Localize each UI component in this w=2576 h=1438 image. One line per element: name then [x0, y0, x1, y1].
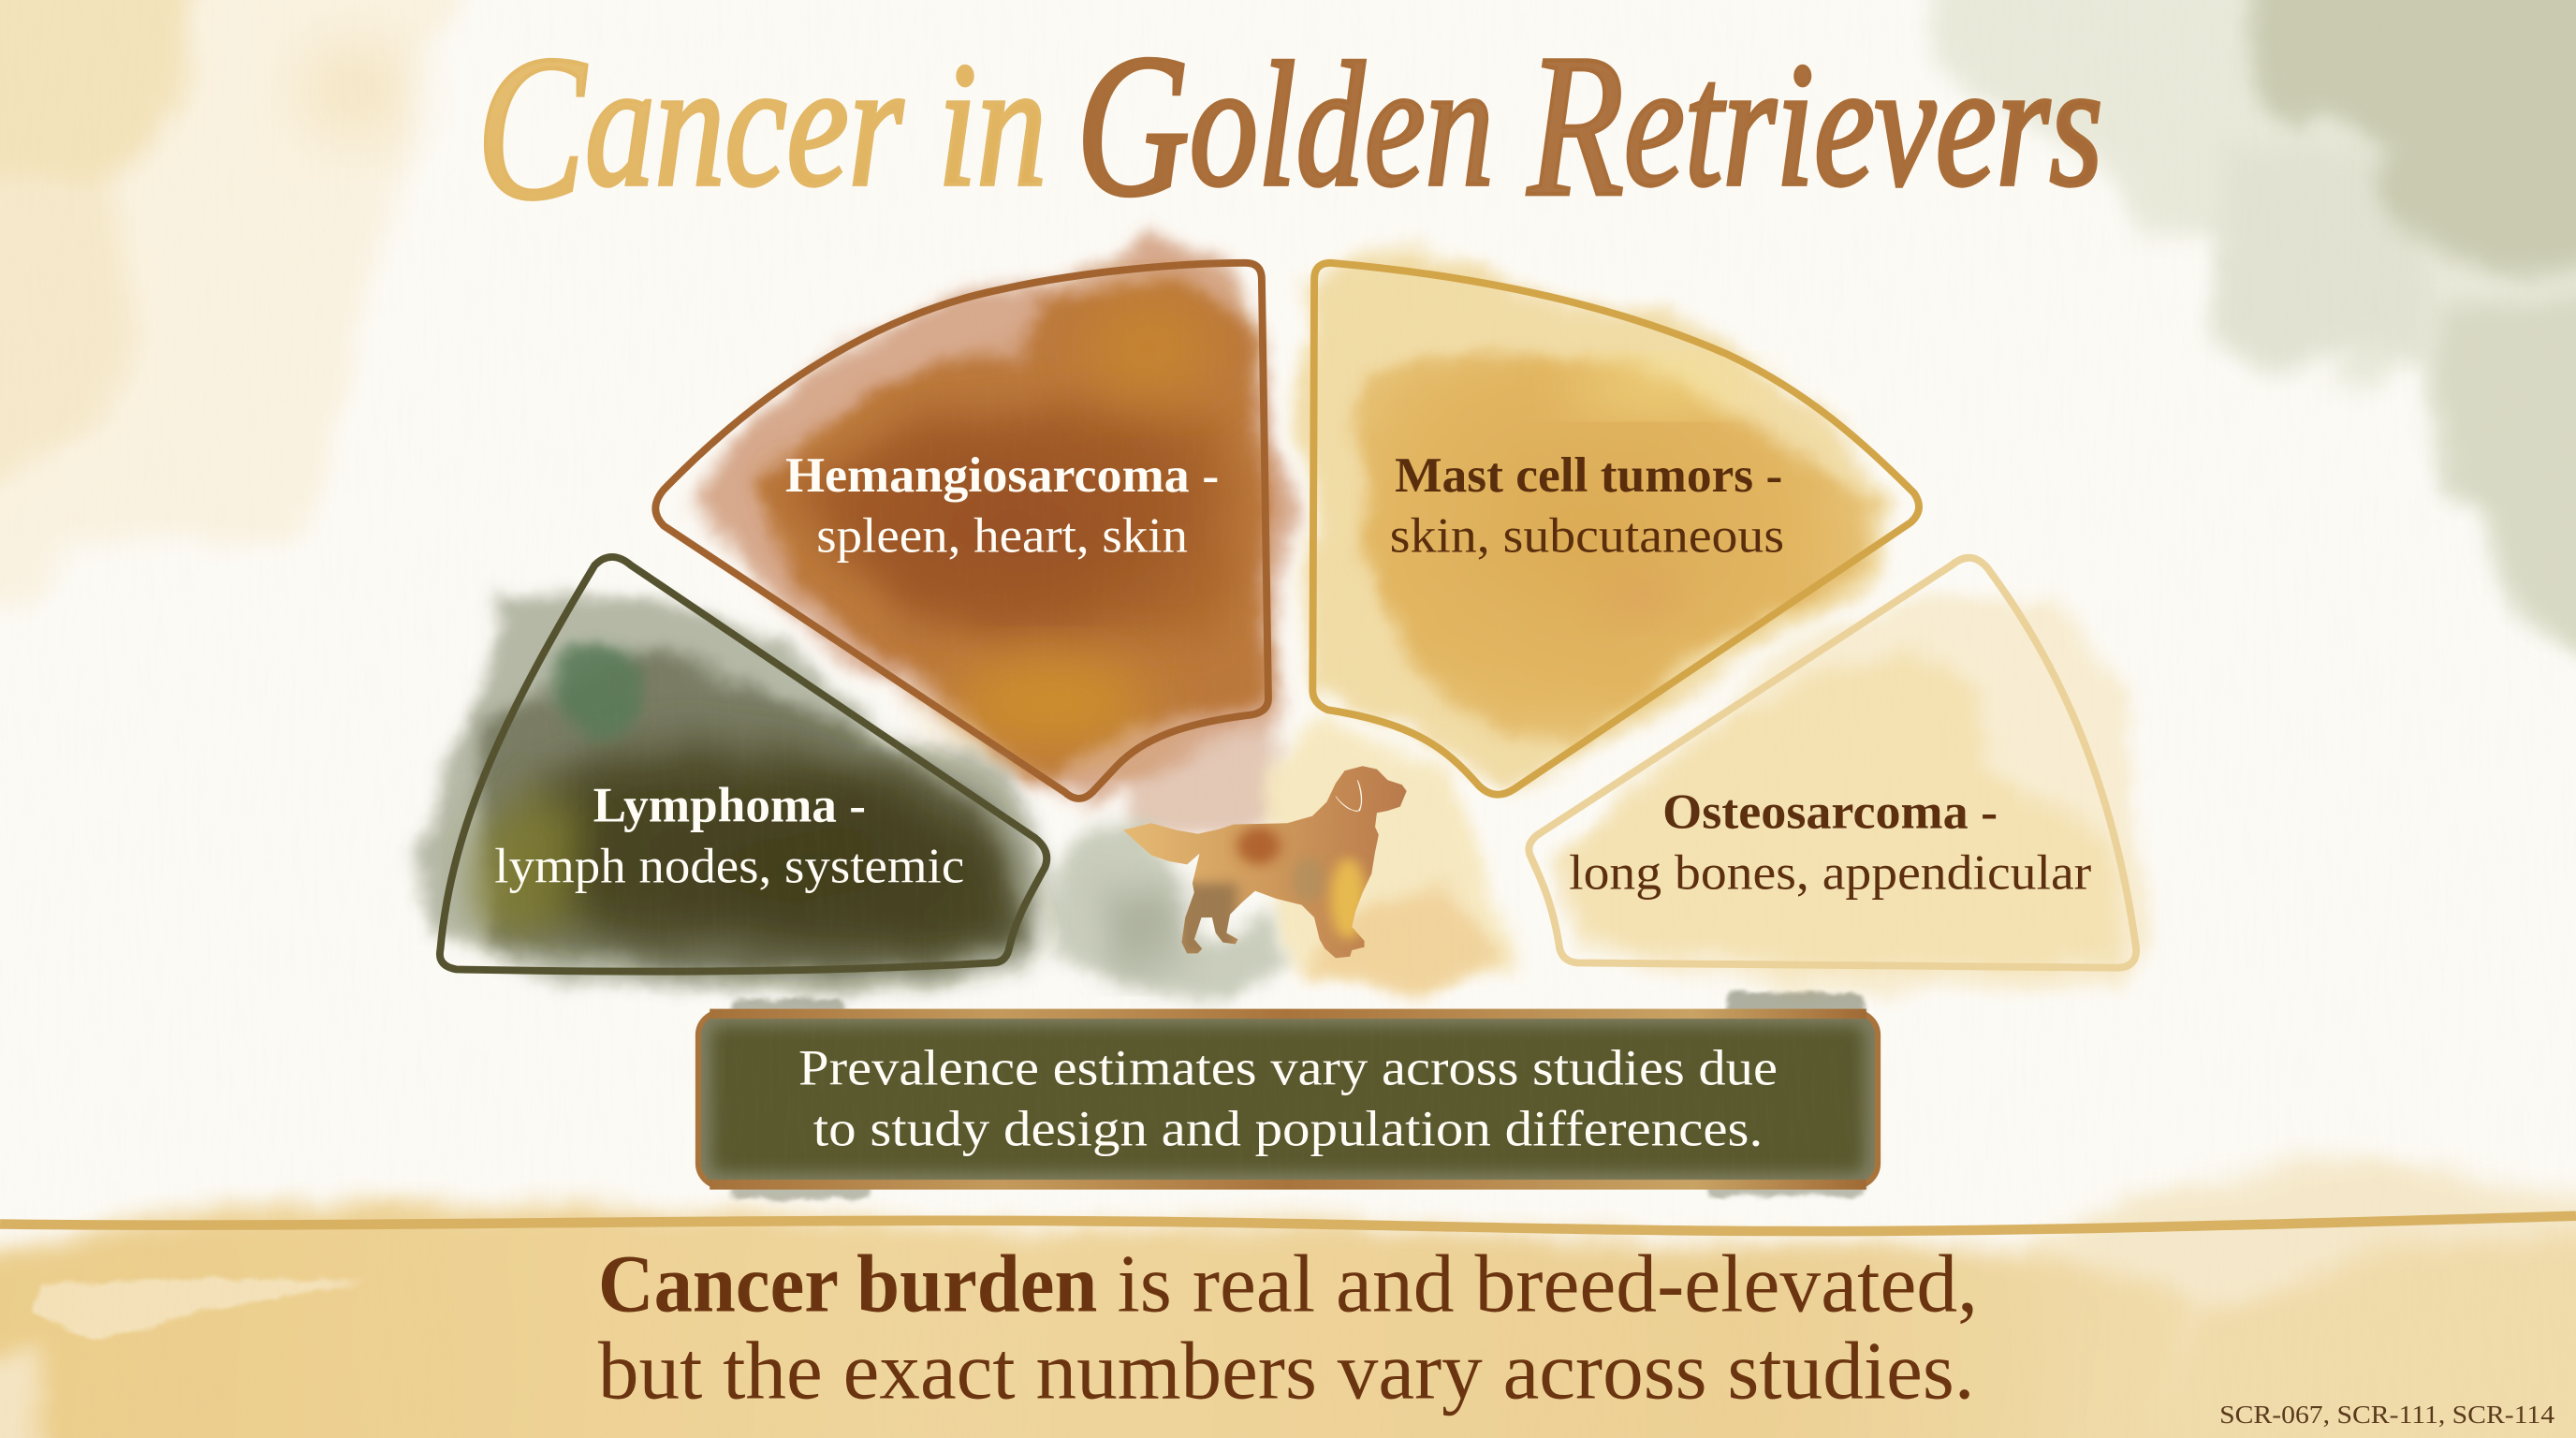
callout: prevalence note: to study design and population differences.: [813, 1100, 1763, 1156]
source references: SCR-067, SCR-111, SCR-114: [2219, 1401, 2555, 1429]
gold bottom bar: [710, 1180, 1866, 1190]
outline: [440, 557, 1046, 972]
label: Lymphoma -: [593, 779, 866, 833]
label: Mast cell tumors -: [1395, 448, 1782, 503]
title: ancer in: [585, 26, 1046, 223]
label: [1569, 785, 2092, 900]
title: [476, 13, 2102, 242]
label: [1390, 448, 1784, 564]
outline: [655, 263, 1268, 799]
divider line: [0, 1216, 2576, 1231]
title: olden: [1190, 26, 1528, 223]
outline: [1312, 263, 1919, 795]
conclusion text: but the exact numbers vary across studies.: [598, 1326, 1975, 1416]
label: lymph nodes, systemic: [494, 839, 964, 893]
gold top bar: [710, 1009, 1866, 1019]
bottom gold band: [0, 1157, 2576, 1438]
conclusion text: [598, 1239, 1978, 1416]
conclusion text: is real and breed-elevated,: [1117, 1239, 1978, 1329]
panel: lymphoma: [414, 557, 1051, 994]
panel: mast cell tumors: [1301, 238, 1919, 795]
title: C: [476, 13, 587, 242]
title: R: [1527, 13, 1624, 239]
title: etrievers: [1624, 26, 2102, 223]
icon: golden retriever silhouette: [1119, 761, 1412, 961]
label: Hemangiosarcoma -: [785, 448, 1219, 503]
label: [494, 779, 964, 893]
panel: osteosarcoma: [1529, 558, 2156, 994]
conclusion text: Cancer burden: [598, 1239, 1097, 1329]
label: [785, 448, 1219, 564]
title: G: [1076, 13, 1190, 239]
label: skin, subcutaneous: [1390, 509, 1784, 564]
outline: [1529, 558, 2136, 968]
callout: prevalence note: Prevalence estimates vary across studies due: [798, 1039, 1778, 1095]
label: spleen, heart, skin: [816, 509, 1188, 564]
label: long bones, appendicular: [1569, 845, 2092, 900]
watercolor behind dog: [1048, 714, 1519, 1005]
label: Osteosarcoma -: [1662, 785, 1998, 840]
callout: prevalence note: [698, 994, 1878, 1199]
panel: hemangiosarcoma: [655, 235, 1290, 808]
